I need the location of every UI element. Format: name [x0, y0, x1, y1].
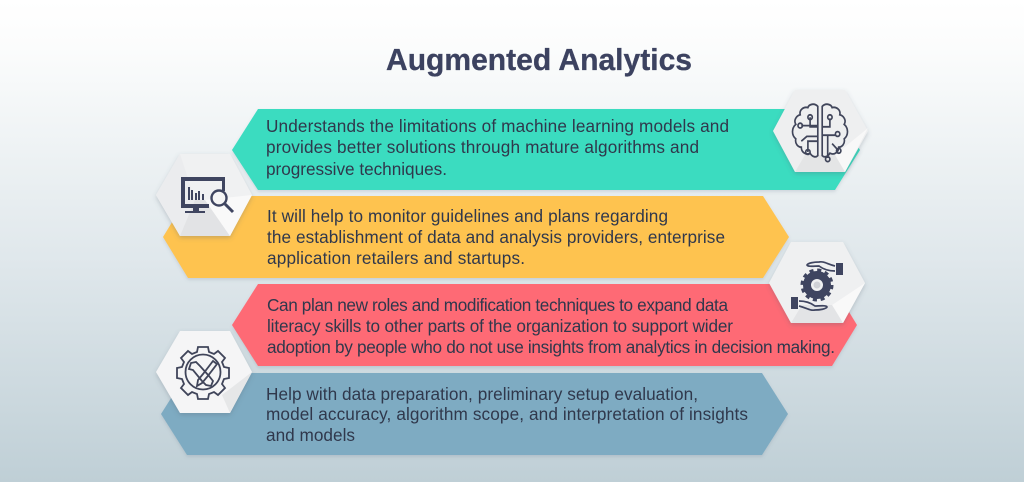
icon: monitor hexagon [156, 154, 252, 236]
icon: tools gear hexagon [156, 331, 252, 413]
monitor glyph [181, 177, 233, 213]
text: teal banner: provides better solutions through mature algorithms and [266, 137, 699, 157]
text: yellow banner: It will help to monitor guidelines and plans regarding [267, 206, 668, 226]
banner: teal [232, 109, 860, 190]
text: blue banner: and models [266, 425, 355, 445]
text: blue banner [266, 384, 748, 445]
icon: gear hands hexagon [769, 242, 865, 323]
title: Augmented Analytics [386, 42, 692, 77]
banner: blue [161, 373, 788, 455]
banner: red [232, 284, 857, 366]
banner: yellow [163, 196, 789, 278]
gears and hands glyph [791, 262, 843, 310]
text: red banner [267, 295, 835, 357]
icon: brain hexagon [773, 90, 868, 172]
text: red banner: adoption by people who do not use insights from analytics in decision making. [267, 337, 835, 357]
brain glyph [792, 104, 848, 162]
text: blue banner: Help with data preparation, preliminary setup evaluation, [266, 384, 698, 404]
text: yellow banner: application retailers and startups. [267, 248, 525, 268]
text: teal banner: progressive techniques. [266, 159, 447, 179]
text: yellow banner [267, 206, 725, 268]
gear and tools glyph [177, 347, 229, 399]
text: yellow banner: the establishment of data and analysis providers, enterprise [267, 227, 725, 247]
text: teal banner: Understands the limitations of machine learning models and [266, 116, 729, 136]
text: red banner: Can plan new roles and modification techniques to expand data [267, 295, 728, 315]
text: red banner: literacy skills to other parts of the organization to support wider [267, 316, 733, 336]
text: blue banner: model accuracy, algorithm scope, and interpretation of insights [266, 404, 748, 424]
text: teal banner [266, 116, 729, 179]
